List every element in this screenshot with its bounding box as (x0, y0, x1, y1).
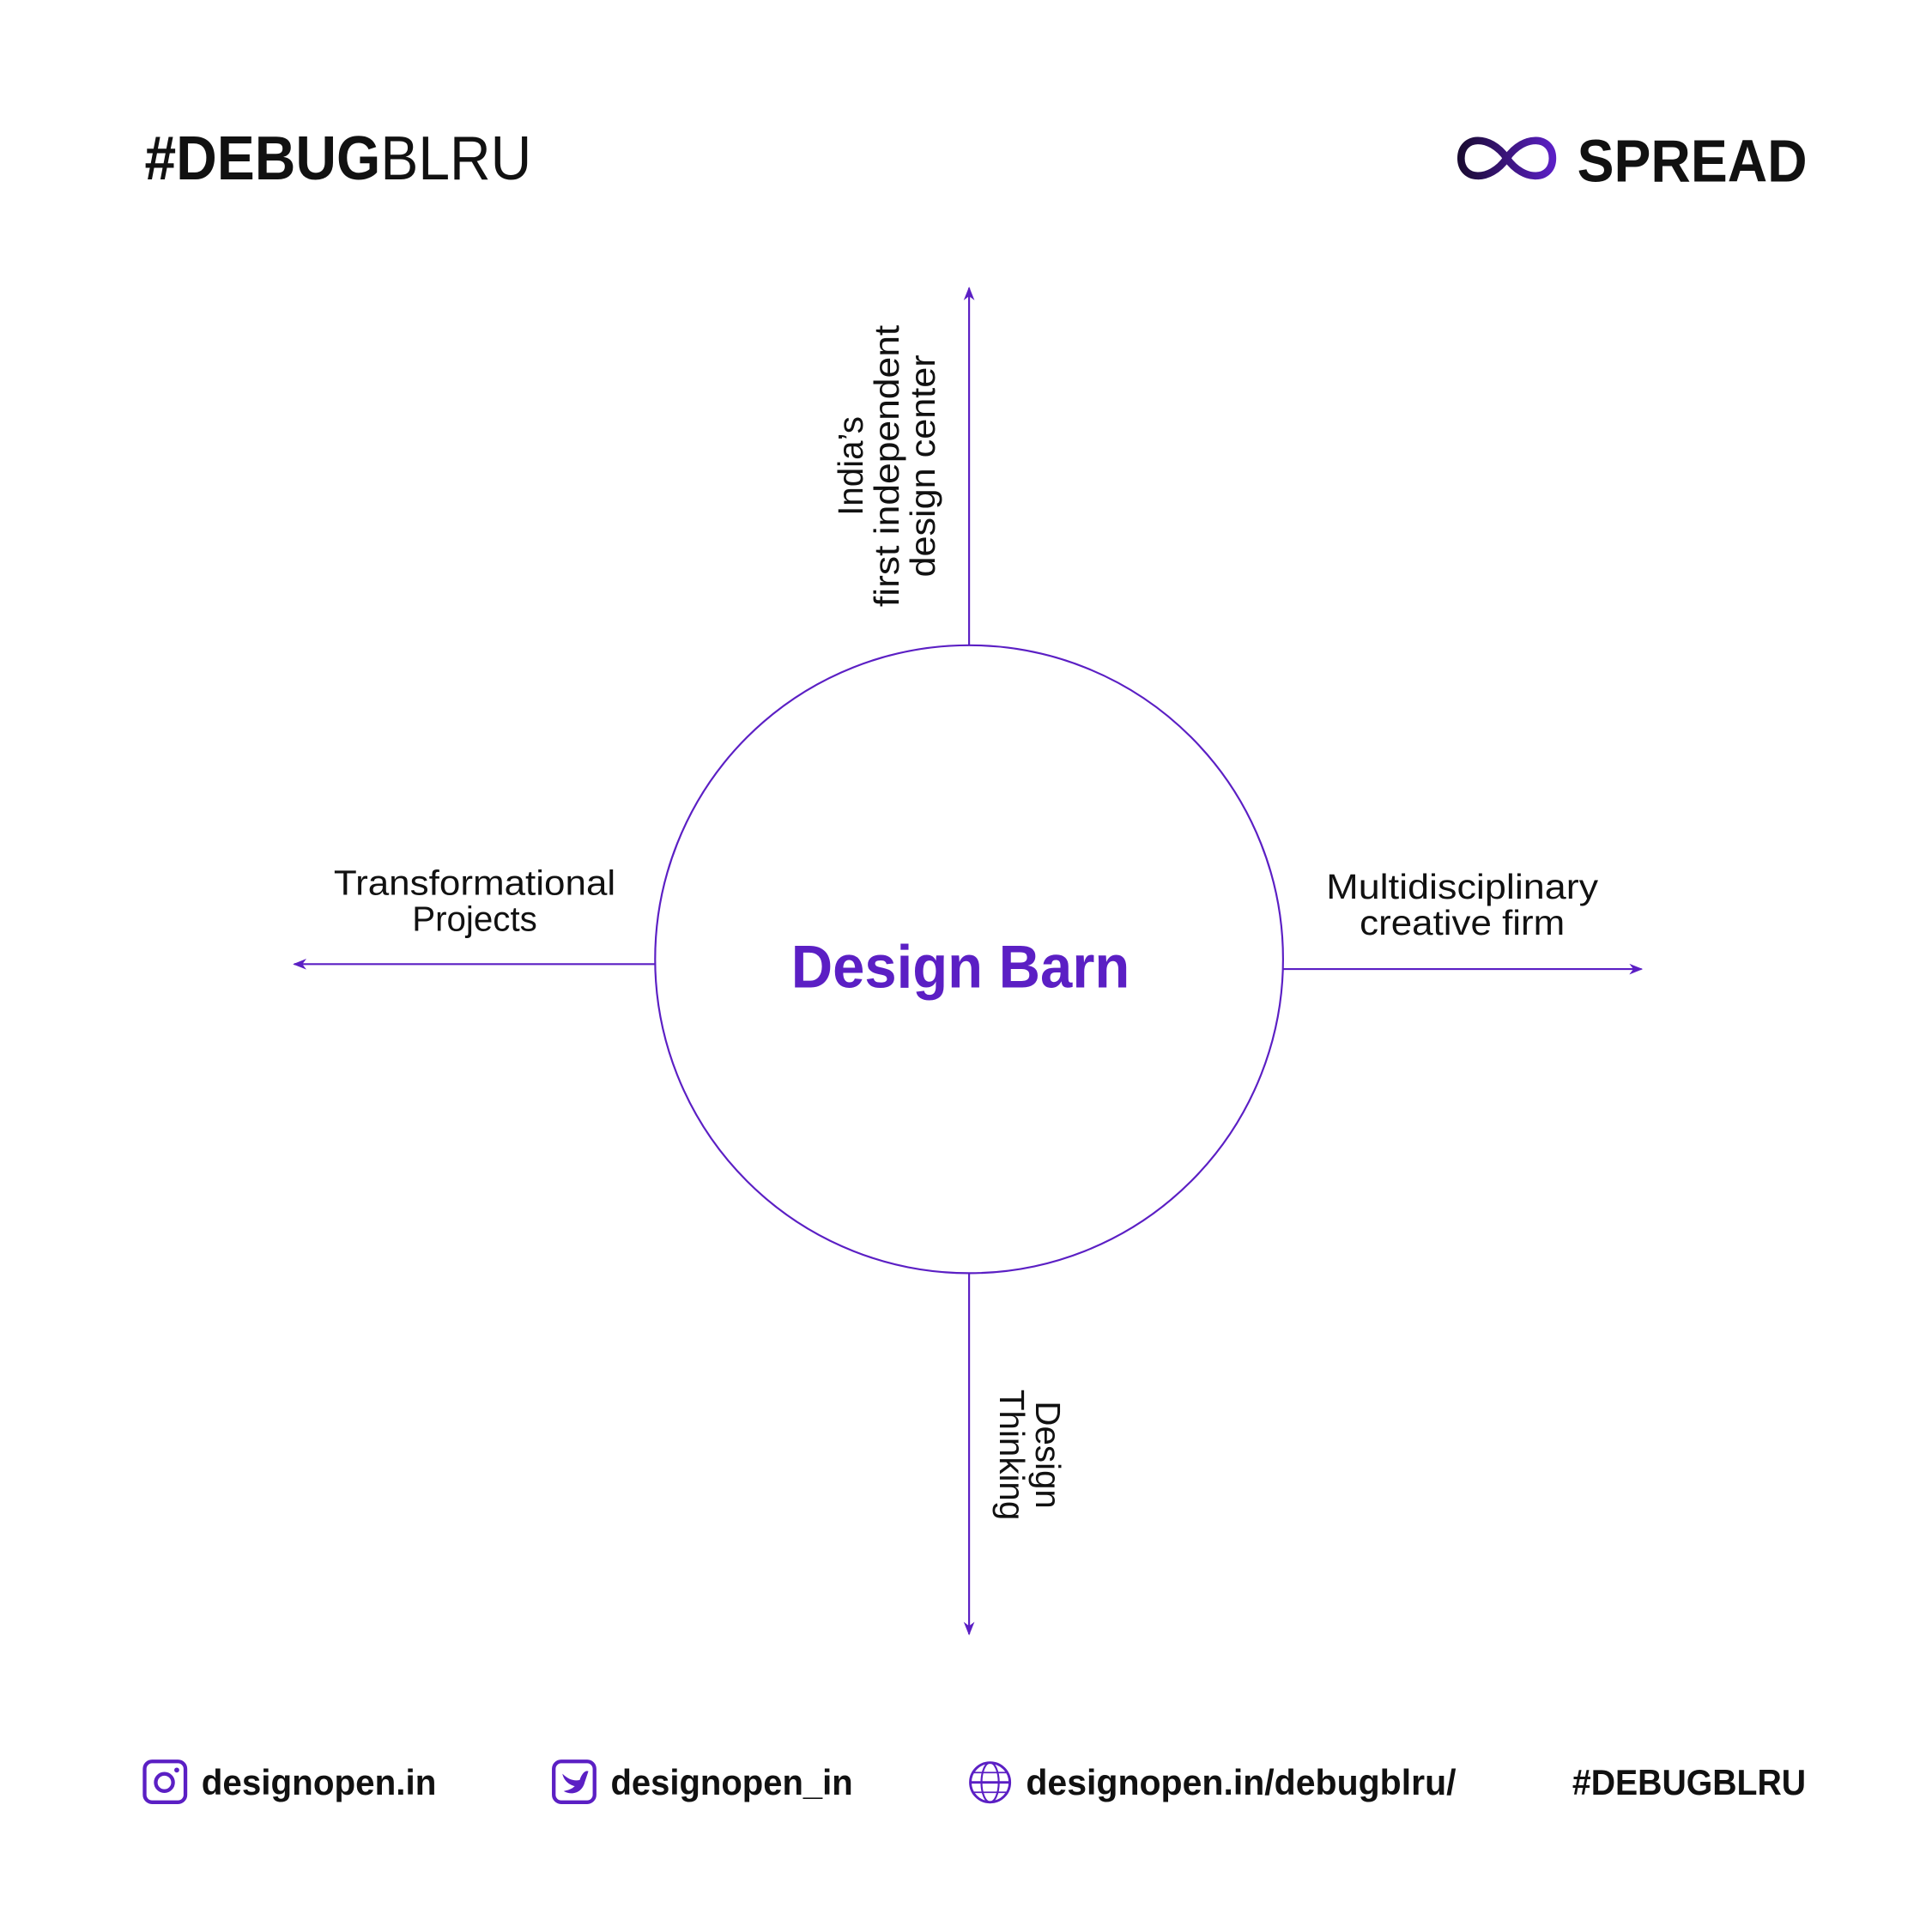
label: top (831, 325, 942, 607)
label: top: design center (903, 354, 942, 578)
label: bottom: Thinking (992, 1390, 1032, 1520)
footer: hashtag: #DEBUGBLRU (1572, 1762, 1806, 1802)
label: top: first independent (867, 325, 906, 607)
label: left: Transformational (334, 863, 615, 903)
arrow: left (294, 963, 655, 965)
header: SPREAD logo: SPREAD (1578, 128, 1808, 195)
header: SPREAD logo (1461, 128, 1808, 195)
label: top: India’s (831, 416, 870, 516)
header: DEBUGBLRU logo: #DEBUGBLRU (145, 124, 531, 193)
arrow: down (968, 1273, 970, 1634)
arrow: right (1283, 968, 1642, 970)
label: bottom: Design (1028, 1401, 1068, 1509)
icon: infinity (1461, 141, 1553, 176)
label: bottom (992, 1390, 1068, 1520)
arrow: up (968, 288, 970, 645)
central circle (655, 645, 1283, 1273)
title: Design Barn: Design Barn (791, 933, 1130, 1001)
label: left: Projects (412, 899, 537, 938)
footer: website: designopen.in/debugblru/ (1026, 1762, 1457, 1802)
footer: instagram: designopen.in (202, 1762, 436, 1802)
footer: twitter: designopen_in (610, 1762, 853, 1802)
label: right: creative firm (1360, 903, 1565, 942)
label: right: Multidisciplinary (1326, 867, 1599, 906)
